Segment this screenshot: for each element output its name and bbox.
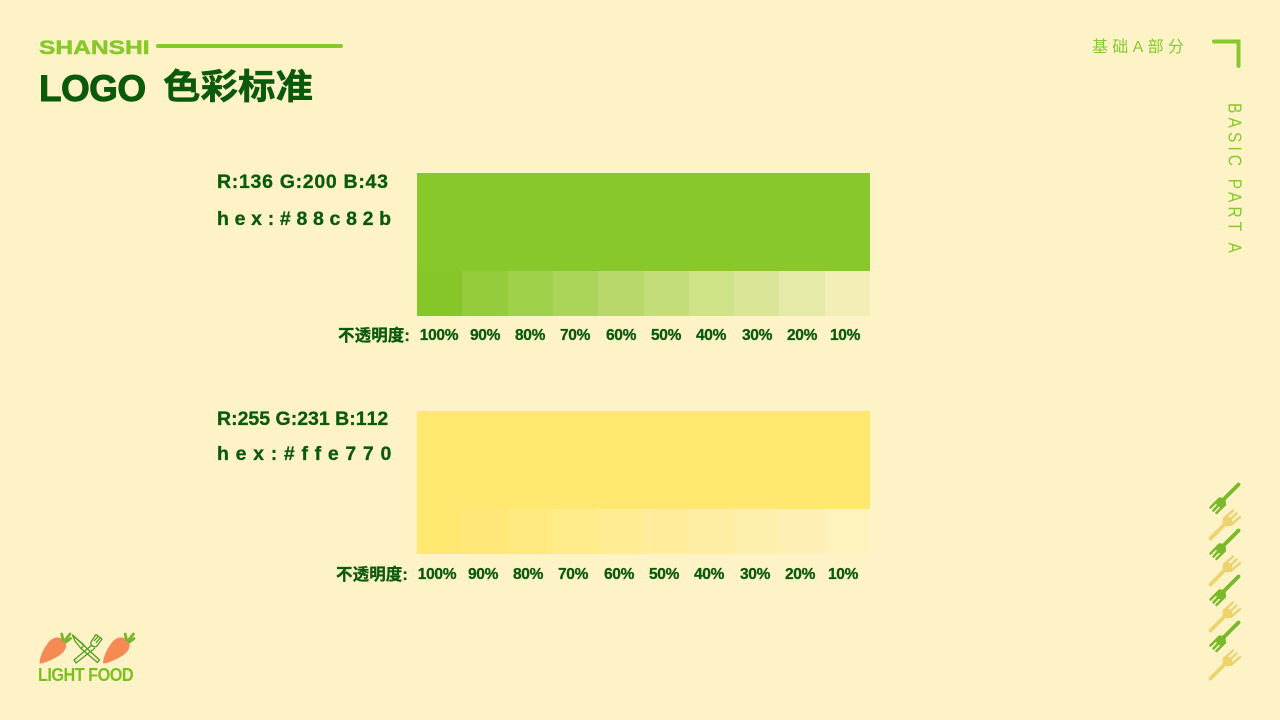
yellow opacity labels: 不透明度: — [336, 566, 408, 584]
icon: yellow fork 4 — [1210, 650, 1240, 678]
green opacity labels: 70% — [560, 327, 590, 344]
logo text: LIGHT FOOD: LIGHT FOOD — [38, 664, 133, 685]
green opacity labels: 30% — [742, 327, 772, 344]
green opacity tiles — [417, 271, 870, 316]
corner bracket — [1212, 40, 1240, 68]
yellow opacity labels: 10% — [828, 566, 858, 583]
yellow opacity labels: 100% — [418, 566, 456, 583]
green opacity labels: 10% — [830, 327, 860, 344]
green RGB: R:136 G:200 B:43 — [217, 171, 389, 193]
green opacity labels: 50% — [651, 327, 681, 344]
icon column: forks — [1208, 482, 1242, 680]
yellow opacity labels: 30% — [740, 566, 770, 583]
title: LOGO: LOGO — [39, 68, 146, 109]
section label: 基础A部分: 基础A部分 — [1092, 39, 1188, 56]
icon: yellow fork 2 — [1210, 556, 1240, 584]
green opacity labels: 20% — [787, 327, 817, 344]
yellow opacity labels: 70% — [558, 566, 588, 583]
yellow opacity labels: 40% — [694, 566, 724, 583]
icon: crossed knife and fork — [72, 634, 102, 663]
green opacity labels: 100% — [420, 327, 458, 344]
yellow RGB: R:255 G:231 B:112 — [217, 408, 388, 430]
icon: yellow fork 1 — [1210, 510, 1240, 538]
green colour values — [217, 171, 397, 230]
yellow opacity labels: 90% — [468, 566, 498, 583]
icon: green fork 2 — [1210, 530, 1238, 559]
yellow opacity labels: 20% — [785, 566, 815, 583]
icon: yellow fork 3 — [1210, 602, 1240, 630]
yellow hex: hex:#ffe770 — [217, 443, 398, 465]
icon: green fork 4 — [1210, 622, 1238, 651]
yellow opacity labels: 80% — [513, 566, 543, 583]
green opacity labels: 不透明度: — [338, 327, 410, 345]
yellow opacity tiles — [417, 509, 870, 554]
yellow opacity labels — [336, 566, 858, 584]
icon: green fork 1 — [1210, 484, 1238, 513]
yellow opacity labels: 50% — [649, 566, 679, 583]
title Chinese: 色彩标准 — [163, 67, 313, 106]
green opacity labels: 80% — [515, 327, 545, 344]
green opacity labels — [338, 326, 860, 345]
icon: left carrot — [40, 634, 70, 664]
green swatch with opacity scale — [417, 173, 870, 316]
heading accent line — [156, 44, 343, 48]
yellow swatch with opacity scale — [417, 411, 870, 554]
yellow colour values — [217, 408, 398, 465]
green opacity labels: 40% — [696, 327, 726, 344]
icon: green fork 3 — [1210, 576, 1238, 605]
yellow opacity labels: 60% — [604, 566, 634, 583]
brand label: SHANSHI: SHANSHI — [39, 37, 150, 59]
logo: carrots with knife and fork — [40, 632, 136, 664]
vertical text: BASIC PART A: BASIC PART A — [1224, 103, 1244, 257]
green hex: hex:#88c82b — [217, 208, 397, 230]
green opacity labels: 90% — [470, 327, 500, 344]
icon: right carrot — [103, 634, 134, 664]
green opacity labels: 60% — [606, 327, 636, 344]
